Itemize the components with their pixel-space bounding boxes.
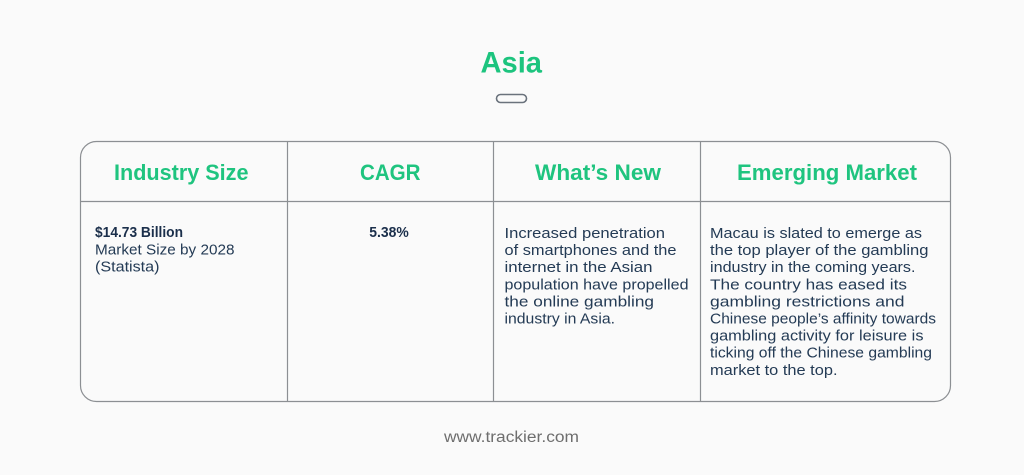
text: what's new body: industry in Asia. — [504, 312, 615, 328]
text: emerging market body — [710, 226, 936, 379]
text: emerging market body: gambling activity for leisure is — [710, 329, 924, 345]
text: what's new body: Increased penetration — [504, 226, 665, 242]
text: emerging market body: industry in the coming years. — [710, 260, 916, 276]
value: CAGR: 5.38% — [369, 225, 409, 241]
text: what's new body: the online gambling — [504, 294, 654, 310]
table frame and grid — [80, 142, 950, 402]
value: market size: $14.73 Billion — [95, 225, 183, 241]
heading: Emerging Market: Emerging Market — [737, 160, 918, 185]
value: market size — [95, 225, 234, 276]
heading: Industry Size: Industry Size — [114, 160, 248, 185]
heading: CAGR: CAGR — [360, 160, 421, 185]
text: emerging market body: the top player of the gambling — [710, 243, 928, 259]
text: emerging market body: gambling restrictions and — [710, 294, 904, 310]
column: CAGR — [360, 160, 421, 241]
footer URL: www.trackier.com — [443, 429, 579, 446]
table — [80, 142, 950, 402]
text: emerging market body: Chinese people’s affinity towards — [710, 312, 936, 328]
value: market size: (Statista) — [95, 260, 160, 276]
column: Industry Size — [95, 160, 248, 276]
text: what's new body: population have propelled — [504, 277, 688, 293]
title: Asia — [480, 46, 542, 80]
text: what's new body: internet in the Asian — [504, 260, 652, 276]
text: emerging market body: market to the top. — [710, 363, 838, 379]
text: what's new body — [504, 226, 688, 328]
text: emerging market body: The country has eased its — [710, 277, 907, 293]
text: emerging market body: ticking off the Chinese gambling — [710, 346, 932, 362]
text: emerging market body: Macau is slated to emerge as — [710, 226, 922, 242]
heading: What's New: What’s New — [535, 160, 662, 185]
title pill ornament — [496, 94, 526, 102]
column: Emerging Market — [710, 160, 936, 379]
value: market size: Market Size by 2028 — [95, 242, 234, 258]
column: What's New — [504, 160, 688, 328]
text: what's new body: of smartphones and the — [504, 243, 676, 259]
